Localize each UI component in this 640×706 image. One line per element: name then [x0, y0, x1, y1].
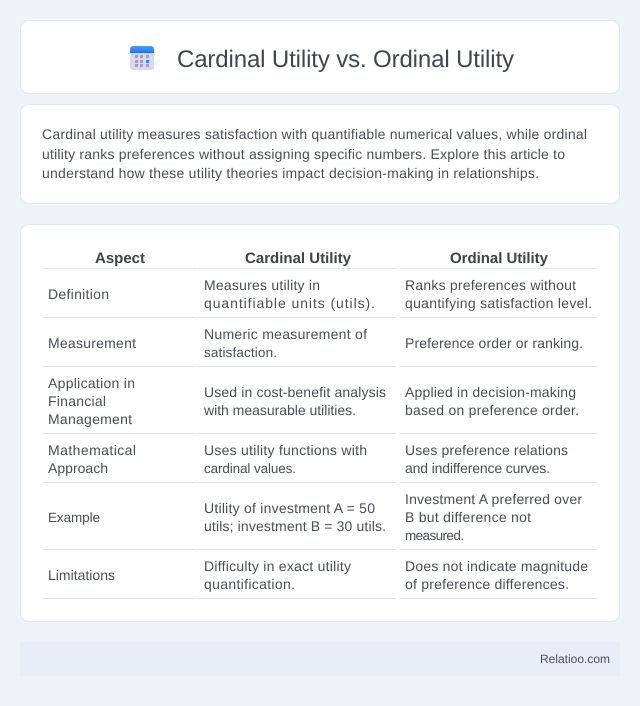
row: measurement: Measurement	[48, 335, 136, 351]
panel: header	[20, 20, 620, 94]
row: example	[48, 491, 582, 543]
row: example: B but difference not	[405, 509, 531, 525]
row: example: Investment A preferred over	[405, 491, 582, 507]
row: limitations: Difficulty in exact utility	[204, 558, 351, 574]
row: measurement: Numeric measurement of	[204, 326, 367, 342]
row: application in financial management: Applied in decision-making	[405, 384, 576, 400]
row: application in financial management: Application in	[48, 375, 135, 391]
row: measurement: satisfaction.	[204, 345, 277, 360]
row: definition: quantifying satisfaction level.	[405, 295, 592, 311]
footer bar	[20, 642, 620, 676]
row: definition: Measures utility in	[204, 277, 320, 293]
row: mathematical approach: Uses utility functions with	[204, 442, 367, 458]
panel: intro text: understand how these utility theories impact decision-making in relationships.	[42, 165, 539, 181]
row: application in financial management: Financial	[48, 393, 106, 409]
title: Cardinal Utility vs. Ordinal Utility	[177, 46, 514, 73]
row: mathematical approach: cardinal values.	[204, 461, 296, 476]
row: definition: Definition	[48, 286, 109, 302]
row: mathematical approach: Mathematical	[48, 442, 136, 458]
row: application in financial management: with measurable utilities.	[203, 402, 356, 418]
panel: intro text	[20, 104, 620, 204]
row: limitations: quantification.	[204, 576, 295, 592]
panel: intro text: utility ranks preferences without assigning specific numbers. Explore this article to	[42, 146, 565, 162]
panel: intro text: Cardinal utility measures satisfaction with quantifiable numerical values, while ordinal	[42, 126, 587, 142]
row: application in financial management	[48, 375, 579, 427]
row: limitations: of preference differences.	[405, 576, 569, 592]
row: example: Utility of investment A = 50	[204, 500, 375, 516]
row: mathematical approach: Uses preference relations	[405, 442, 568, 458]
row: definition	[48, 277, 592, 311]
row: example: utils; investment B = 30 utils.	[204, 518, 386, 534]
row: definition: quantifiable units (utils).	[204, 295, 375, 311]
row: example: Example	[48, 510, 100, 525]
row: mathematical approach: and indifference curves.	[405, 460, 550, 476]
row: measurement: Preference order or ranking.	[405, 335, 583, 351]
footer bar: Relatioo.com	[540, 652, 610, 666]
row: limitations: Does not indicate magnitude	[405, 558, 588, 574]
row: limitations: Limitations	[48, 567, 115, 583]
table header row: Cardinal Utility	[245, 250, 352, 267]
icon: calendar grid	[130, 46, 154, 70]
row: mathematical approach	[48, 442, 568, 476]
table header row: Aspect	[95, 250, 145, 267]
row: example: measured.	[405, 528, 464, 543]
row: measurement	[48, 326, 583, 360]
row: application in financial management: Used in cost-benefit analysis	[204, 384, 386, 400]
row: application in financial management: based on preference order.	[405, 402, 579, 418]
row: mathematical approach: Approach	[48, 460, 108, 476]
row: definition: Ranks preferences without	[405, 277, 576, 293]
row: application in financial management: Management	[48, 411, 132, 427]
table header row	[95, 250, 549, 267]
panel: comparison table	[20, 224, 620, 622]
row: limitations	[48, 558, 588, 592]
table header row: Ordinal Utility	[450, 250, 549, 267]
